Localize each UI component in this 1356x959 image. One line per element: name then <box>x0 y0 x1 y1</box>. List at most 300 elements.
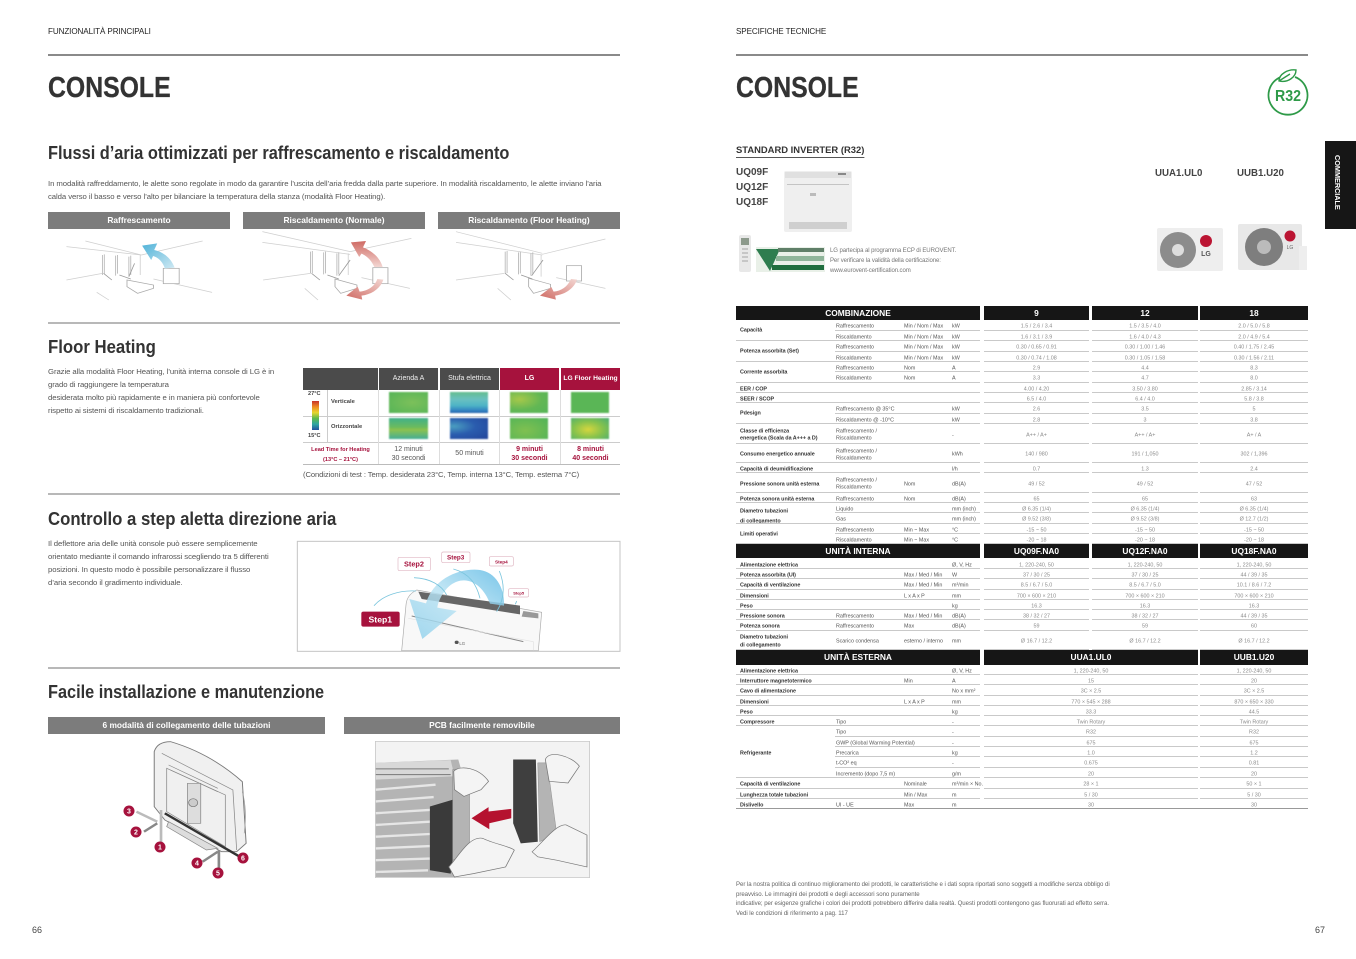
marker 4: 4 <box>195 860 199 868</box>
pipes <box>136 810 161 843</box>
text: floor heating description: desiderata molto più rapidamente e in maniera più confortevole <box>48 393 260 402</box>
specification table: Ø 16.7 / 12.2 <box>1238 638 1270 644</box>
specification table: m <box>952 792 956 798</box>
text: Eurovent certification <box>830 248 956 274</box>
specification table: Pressione sonora unità esterna <box>740 481 819 487</box>
specification table: Twin Rotary <box>1240 719 1268 725</box>
text: floor heating description <box>48 367 274 415</box>
specification table: W <box>952 572 957 578</box>
header: size 9: 9 <box>1034 308 1039 318</box>
heatmap: Azienda A horizontal <box>389 418 428 439</box>
specification table: 44 / 39 / 35 <box>1240 613 1267 619</box>
text: step control description <box>48 539 269 587</box>
specification table: -20 ~ 18 <box>1244 537 1264 543</box>
text: step control description: Il deflettore aria delle unità console può essere semplicemente <box>48 539 258 548</box>
specification table: Raffrescamento <box>836 365 874 371</box>
subheading: standard inverter: STANDARD INVERTER (R32) <box>736 145 864 156</box>
specification table: 3.3 <box>1033 375 1040 381</box>
product: outdoor unit UUA1: LG <box>1201 251 1211 258</box>
header: UUA1.UL0: UUA1.UL0 <box>1071 652 1111 662</box>
specification table: GWP (Global Warming Potential) <box>836 740 915 746</box>
illustration: louver steps <box>296 540 620 652</box>
row label: Orizzontale: Orizzontale <box>331 424 362 430</box>
row label: Verticale: Verticale <box>331 399 355 405</box>
specification table: Nominale <box>904 781 927 787</box>
tab: piping modes: 6 modalità di collegamento delle tubazioni <box>102 720 270 730</box>
page number 66: 66 <box>32 925 42 935</box>
header: size 9 <box>984 306 1089 320</box>
specification table: 1.6 / 3.1 / 3.9 <box>1021 334 1052 340</box>
specification table: 4.00 / 4.20 <box>1024 386 1049 392</box>
footnote: Per la nostra politica di continuo miglioramento dei prodotti, le caratteristiche e i dati sopra riportati sono soggetti a modifiche senza obbligo di <box>736 881 1110 888</box>
specification table: m³/min × No. <box>952 781 983 787</box>
specification table: 0.7 <box>1033 466 1040 472</box>
heading: floor heating: Floor Heating <box>48 337 156 357</box>
specification table: Raffrescamento / <box>836 477 877 483</box>
specification table: Compressore <box>740 719 774 725</box>
specification table: Capacità di ventilazione <box>740 582 800 588</box>
specification table: kW <box>952 417 960 423</box>
specification table: 49 / 52 <box>1137 481 1153 487</box>
header: UQ09F.NA0: UQ09F.NA0 <box>1014 546 1059 556</box>
specification table: 3C × 2.5 <box>1081 688 1101 694</box>
specification table: - <box>952 729 954 735</box>
specification table: 0.30 / 1.00 / 1.46 <box>1125 344 1165 350</box>
text: air flows description <box>48 179 602 201</box>
specification table: Consumo energetico annuale <box>740 451 815 457</box>
specification table: - <box>952 719 954 725</box>
page number 67: 67 <box>1315 925 1325 935</box>
specification table: Raffrescamento <box>836 527 874 533</box>
heading: step control: Controllo a step aletta direzione aria <box>48 509 336 529</box>
text: Eurovent certification: www.eurovent-certification.com <box>830 268 911 274</box>
tab: normal heating <box>243 212 425 229</box>
specification table: Gas <box>836 516 846 522</box>
label: Step 3: Step3 <box>447 555 465 562</box>
text: floor heating description: rispetto ai sistemi di riscaldamento tradizionali. <box>48 406 204 415</box>
specification table: dB(A) <box>952 623 966 629</box>
column: LG Floor Heating: LG Floor Heating <box>563 375 618 382</box>
specification table: 65 <box>1142 496 1148 502</box>
specification table: Raffrescamento / <box>836 448 877 454</box>
footnote <box>736 881 1110 917</box>
specification table: Diametro tubazioni <box>740 634 788 640</box>
specification table: 30 <box>1251 802 1257 808</box>
specification table: Tipo <box>836 729 846 735</box>
illustration: room airflow diagrams <box>66 231 606 300</box>
specification table: kW <box>952 323 960 329</box>
tab: floor heating <box>438 212 620 229</box>
unit body: LG <box>459 641 466 646</box>
illustration: unit back and piping <box>136 741 247 868</box>
specification table: 0.675 <box>1084 760 1098 766</box>
specification table: Scarico condensa <box>836 638 879 644</box>
tab label: COMMERCIALE <box>1333 155 1342 210</box>
specification table: 10.1 / 8.6 / 7.2 <box>1237 582 1271 588</box>
text: step control description: orientato mediante il comando infrarossi scegliendo tra 5 differenti <box>48 552 269 561</box>
value: Azienda A lead time: 30 secondi <box>392 455 425 462</box>
specification table: Min / Nom / Max <box>904 323 943 329</box>
header: UQ09F.NA0 <box>984 544 1089 558</box>
specification table: g/m <box>952 771 961 777</box>
specification table: Min <box>904 678 913 684</box>
footnote: indicative; per esigenze grafiche i colori dei prodotti potrebbero differire dalla realtà. Questi prodotti contengono gas fluorurati ad effetto serra. <box>736 900 1109 907</box>
specification table: energetica (Scala da A+++ a D) <box>740 435 818 441</box>
specification table: di collegamento <box>740 642 781 648</box>
specification table: mm <box>952 699 961 705</box>
specification table: Min / Nom / Max <box>904 334 943 340</box>
specification table: Raffrescamento <box>836 344 874 350</box>
header: UUB1.U20 <box>1200 650 1308 665</box>
specification table: Riscaldamento <box>836 375 872 381</box>
specification table: - <box>952 432 954 438</box>
specification table: 1, 220-240, 50 <box>1019 562 1054 568</box>
specification table: Precarica <box>836 750 859 756</box>
specification table: 302 / 1,396 <box>1240 451 1267 457</box>
specification table: 38 / 32 / 27 <box>1023 613 1050 619</box>
specification table: 16.3 <box>1249 603 1259 609</box>
specification table: 3.8 <box>1250 417 1258 423</box>
value: LG Floor Heating lead time: 40 secondi <box>572 455 609 462</box>
specification table: m³/min <box>952 582 968 588</box>
specification table: Cavo di alimentazione <box>740 688 796 694</box>
header: UQ12F.NA0: UQ12F.NA0 <box>1122 546 1168 556</box>
specification table: di collegamento <box>740 518 781 524</box>
specification table: 8.0 <box>1250 375 1258 381</box>
marker 2: 2 <box>134 830 138 836</box>
specification table: 6.5 / 4.0 <box>1027 396 1046 402</box>
product: outdoor unit UUB1: LG <box>1287 245 1293 251</box>
specification table: 1, 220-240, 50 <box>1074 668 1108 674</box>
specification table: Raffrescamento @ 35°C <box>836 406 894 412</box>
specification table: Ø 16.7 / 12.2 <box>1129 638 1161 644</box>
specification table: A <box>952 678 956 684</box>
specification table: A++ / A+ <box>1135 432 1155 438</box>
specification table: Min ~ Max <box>904 537 929 543</box>
right page title: CONSOLE <box>736 72 859 104</box>
label: lead time: (13°C – 21°C) <box>323 456 358 462</box>
specification table: 2.8 <box>1033 417 1040 423</box>
airflow arrow <box>409 570 504 639</box>
specification table: 1.5 / 2.6 / 3.4 <box>1021 323 1052 329</box>
specification table: Raffrescamento <box>836 323 874 329</box>
specification table: mm (inch) <box>952 506 976 512</box>
column: LG: LG <box>525 375 534 382</box>
header: unità esterna: UNITÀ ESTERNA <box>824 652 892 662</box>
specification table: Min / Max <box>904 792 927 798</box>
specification table: 2.6 <box>1033 406 1040 412</box>
specification table: Tipo <box>836 719 846 725</box>
value: LG Floor Heating lead time: 8 minuti <box>577 446 604 453</box>
specification table: A <box>952 365 956 371</box>
specification table: Dimensioni <box>740 593 769 599</box>
specification table: 37 / 30 / 25 <box>1023 572 1050 578</box>
marker 3: 3 <box>127 808 131 816</box>
specification table: Capacità di ventilazione <box>740 781 800 787</box>
header: UUB1.U20: UUB1.U20 <box>1234 652 1274 662</box>
specification table: l/h <box>952 466 958 472</box>
specification table: Potenza sonora unità esterna <box>740 496 814 502</box>
specification table: Lunghezza totale tubazioni <box>740 792 808 798</box>
specification table: 1, 220-240, 50 <box>1237 668 1271 674</box>
text: air flows description: In modalità raffreddamento, le alette sono regolate in modo da garantire l’uscita dell’aria fredda dalla parte superiore. In modalità riscaldamento, le alette inviano l’aria <box>48 179 601 188</box>
specification table: Capacità <box>740 327 762 333</box>
text: step control description: d’aria secondo il gradimento individuale. <box>48 578 183 587</box>
column: LG Floor Heating <box>561 368 620 390</box>
heading: installation: Facile installazione e manutenzione <box>48 682 324 702</box>
header: unità interna: UNITÀ INTERNA <box>825 546 891 556</box>
specification table: - <box>952 740 954 746</box>
marker 1 <box>154 842 166 852</box>
specification table: A+ / A <box>1247 432 1261 438</box>
header: UQ18F.NA0 <box>1200 544 1308 558</box>
specification table: Liquido <box>836 506 853 512</box>
text: floor heating description: Grazie alla modalità Floor Heating, l’unità interna console di LG è in <box>48 367 274 376</box>
text: floor heating description: grado di raggiungere la temperatura <box>48 380 169 389</box>
column: Azienda A <box>379 368 438 390</box>
specification table: R32 <box>1249 729 1259 735</box>
footnote: Vedi le condizioni di riferimento a pag. 117 <box>736 910 848 917</box>
specification table: Raffrescamento <box>836 623 874 629</box>
tab: removable PCB: PCB facilmente removibile <box>429 720 535 730</box>
specification table: Potenza assorbita (Set) <box>740 348 799 354</box>
specification table: 0.40 / 1.75 / 2.45 <box>1234 344 1274 350</box>
specification table: Riscaldamento @ -10°C <box>836 417 894 423</box>
specification table: -20 ~ 18 <box>1027 537 1046 543</box>
models: indoor units: UQ09F <box>736 167 768 178</box>
specification table: 47 / 52 <box>1246 481 1262 487</box>
specification table: 8.3 <box>1250 365 1258 371</box>
left page title: CONSOLE <box>48 72 171 104</box>
specification table: - <box>952 760 954 766</box>
value: LG lead time: 9 minuti <box>516 446 543 453</box>
tab: cooling <box>48 212 230 229</box>
specification table: 1, 220-240, 50 <box>1128 562 1162 568</box>
label: Step 5 <box>509 589 529 597</box>
specification table: dB(A) <box>952 496 966 502</box>
specification table: 2.9 <box>1033 365 1040 371</box>
specification table: Raffrescamento <box>836 496 874 502</box>
value: LG lead time: 30 secondi <box>511 455 548 462</box>
specification table: dB(A) <box>952 613 966 619</box>
specification table: °C <box>952 527 958 533</box>
specification table: 770 × 545 × 288 <box>1071 699 1111 705</box>
specification table: Min / Nom / Max <box>904 355 943 361</box>
specification table: Nom <box>904 481 915 487</box>
heatmap: electric heater vertical <box>450 392 488 413</box>
specification table: Ø 6.35 (1/4) <box>1240 506 1268 512</box>
specification table: 30 <box>1088 802 1094 808</box>
specification table: SEER / SCOP <box>740 396 774 402</box>
specification table: Potenza assorbita (UI) <box>740 572 796 578</box>
column: Azienda A: Azienda A <box>393 375 424 382</box>
specification table: 20 <box>1251 678 1257 684</box>
marker 5 <box>212 868 224 878</box>
specification table: 1, 220-240, 50 <box>1237 562 1271 568</box>
specification table: mm <box>952 638 961 644</box>
header: size 18: 18 <box>1249 308 1259 318</box>
specification table: Corrente assorbita <box>740 369 787 375</box>
specification table: Raffrescamento <box>836 613 874 619</box>
specification table: 140 / 980 <box>1025 451 1048 457</box>
value: Azienda A lead time: 12 minuti <box>394 446 423 453</box>
unit body <box>402 590 542 651</box>
header: unità esterna <box>736 650 980 665</box>
text: step control description: posizioni. In questo modo è possibile personalizzare il flusso <box>48 565 250 574</box>
specification table: kW <box>952 406 960 412</box>
section tab: Commerciale <box>1325 141 1356 229</box>
specification table: Classe di efficienza <box>740 428 789 434</box>
header: size 12 <box>1092 306 1198 320</box>
specification table: kW <box>952 334 960 340</box>
label: Step 4 <box>489 557 513 566</box>
models: outdoor UUA1: UUA1.UL0 <box>1155 168 1202 179</box>
text: Eurovent certification: Per verificare la validità della certificazione: <box>830 258 941 264</box>
specification table: Riscaldamento <box>836 435 872 441</box>
text: Eurovent certification: LG partecipa al programma ECP di EUROVENT. <box>830 248 956 254</box>
specification table: Pressione sonora <box>740 613 785 619</box>
header: UUA1.UL0 <box>984 650 1198 665</box>
heatmap: Azienda A vertical <box>389 392 428 413</box>
header: unità interna <box>736 544 980 558</box>
specification table: 44.5 <box>1249 709 1259 715</box>
specification table: Incremento (dopo 7,5 m) <box>836 771 895 777</box>
specification table: Riscaldamento <box>836 537 872 543</box>
specification table: 59 <box>1034 623 1040 629</box>
specification table: kg <box>952 750 958 756</box>
label: Step 1: Step1 <box>369 614 392 624</box>
specification table: m <box>952 802 956 808</box>
specification table: Riscaldamento <box>836 455 872 461</box>
specification table: UI - UE <box>836 802 854 808</box>
room: normal heating <box>262 232 411 300</box>
header: combinazione: COMBINAZIONE <box>825 308 891 318</box>
specification table: Ø, V, Hz <box>952 562 972 568</box>
specification table: 1.5 / 3.5 / 4.0 <box>1129 323 1161 329</box>
value: LG Floor Heating lead time <box>572 446 609 462</box>
specification table: °C <box>952 537 958 543</box>
specification table: 700 × 600 × 210 <box>1234 593 1274 599</box>
specification table: Ø 6.35 (1/4) <box>1131 506 1159 512</box>
header: UQ18F.NA0: UQ18F.NA0 <box>1231 546 1277 556</box>
specification table: -15 ~ 50 <box>1027 527 1046 533</box>
specification table: esterno / interno <box>904 638 943 644</box>
value: LG lead time <box>511 446 548 462</box>
specification table: kW <box>952 355 960 361</box>
specification table: 49 / 52 <box>1028 481 1045 487</box>
heatmap: LG vertical <box>510 392 548 413</box>
chart: heating comparison table <box>303 368 620 479</box>
specification table: EER / COP <box>740 386 767 392</box>
left page header: FUNZIONALITÀ PRINCIPALI <box>48 27 151 36</box>
column: Stufa elettrica <box>440 368 499 390</box>
text: air flows description: calda verso il basso e verso l’alto per bilanciare la temperatura della stanza (modalità Floor Heating). <box>48 192 385 201</box>
specification table: -20 ~ 18 <box>1135 537 1155 543</box>
specification table: Max <box>904 802 914 808</box>
header: UQ12F.NA0 <box>1092 544 1198 558</box>
specification table: R32 <box>1086 729 1096 735</box>
specification table: 20 <box>1088 771 1094 777</box>
heatmap: electric heater horizontal <box>450 418 488 439</box>
value: Azienda A lead time <box>392 446 425 462</box>
product: remote control <box>739 235 751 272</box>
specification table: kg <box>952 603 958 609</box>
value: electric heater lead time: 50 minuti <box>455 450 484 457</box>
specification table: 3 <box>1144 417 1146 423</box>
specification table: 60 <box>1251 623 1257 629</box>
specification table: 3C × 2.5 <box>1244 688 1264 694</box>
specification table: Max <box>904 623 914 629</box>
specification table: L x A x P <box>904 593 925 599</box>
specification table: Potenza sonora <box>740 623 780 629</box>
specification table: 15 <box>1088 678 1094 684</box>
specification table: Diametro tubazioni <box>740 508 788 514</box>
specification table: 8.5 / 6.7 / 5.0 <box>1021 582 1052 588</box>
specification table: 44 / 39 / 35 <box>1240 572 1267 578</box>
column: LG <box>500 368 559 390</box>
specification table: 20 <box>1251 771 1257 777</box>
specification table: 700 × 600 × 210 <box>1125 593 1165 599</box>
marker 6 <box>238 852 248 864</box>
specification table: Capacità di deumidificazione <box>740 466 813 472</box>
marker 4 <box>192 858 202 868</box>
specification table: Interruttore magnetotermico <box>740 678 812 684</box>
heatmap: LG Floor Heating vertical <box>571 392 609 413</box>
footnote: preavviso. Le immagini dei prodotti e degli accessori sono puramente <box>736 891 920 898</box>
specification table: 191 / 1,050 <box>1132 451 1158 457</box>
specification table: 38 / 32 / 27 <box>1132 613 1158 619</box>
specification table: Refrigerante <box>740 750 771 756</box>
specification table: Min / Nom / Max <box>904 344 943 350</box>
specification table: mm (inch) <box>952 516 976 522</box>
specification table: 5 / 30 <box>1084 792 1098 798</box>
label: lead time: Lead Time for Heating <box>311 447 370 453</box>
product: outdoor unit UUA1 <box>1157 228 1223 271</box>
heatmap: LG horizontal <box>510 418 548 439</box>
specification table: 700 × 600 × 210 <box>1017 593 1056 599</box>
label: Step 4: Step4 <box>495 559 508 564</box>
specification table: No x mm² <box>952 688 975 694</box>
product: outdoor unit UUB1 <box>1238 224 1307 270</box>
specification table: Nom <box>904 365 915 371</box>
specification table: Ø 6.35 (1/4) <box>1022 506 1051 512</box>
specification table: 0.30 / 0.65 / 0.91 <box>1016 344 1057 350</box>
specification table: 16.3 <box>1140 603 1150 609</box>
specification table: kg <box>952 709 958 715</box>
specification table: 675 <box>1086 740 1096 746</box>
label: Step 2 <box>398 557 430 571</box>
specification table: 4.4 <box>1141 365 1149 371</box>
specification table: 3.50 / 3.80 <box>1132 386 1158 392</box>
specification table: Riscaldamento <box>836 484 872 490</box>
specification table: 16.3 <box>1031 603 1042 609</box>
scale: temperature min: 15°C <box>308 433 320 439</box>
specification table: 33.3 <box>1086 709 1096 715</box>
specification table: 1.3 <box>1141 466 1149 472</box>
marker 1: 1 <box>158 844 162 852</box>
tab: removable PCB <box>344 717 620 734</box>
specification table: 0.30 / 0.74 / 1.08 <box>1016 355 1057 361</box>
specification table: Riscaldamento <box>836 355 872 361</box>
specification table: 870 × 650 × 330 <box>1234 699 1274 705</box>
marker 6: 6 <box>241 856 245 862</box>
marker 5: 5 <box>216 870 220 878</box>
specification table: Limiti operativi <box>740 531 778 537</box>
column: Stufa elettrica: Stufa elettrica <box>448 375 491 382</box>
specification table: Max / Med / Min <box>904 582 942 588</box>
specification table: mm <box>952 593 961 599</box>
product: indoor console unit <box>784 171 852 232</box>
